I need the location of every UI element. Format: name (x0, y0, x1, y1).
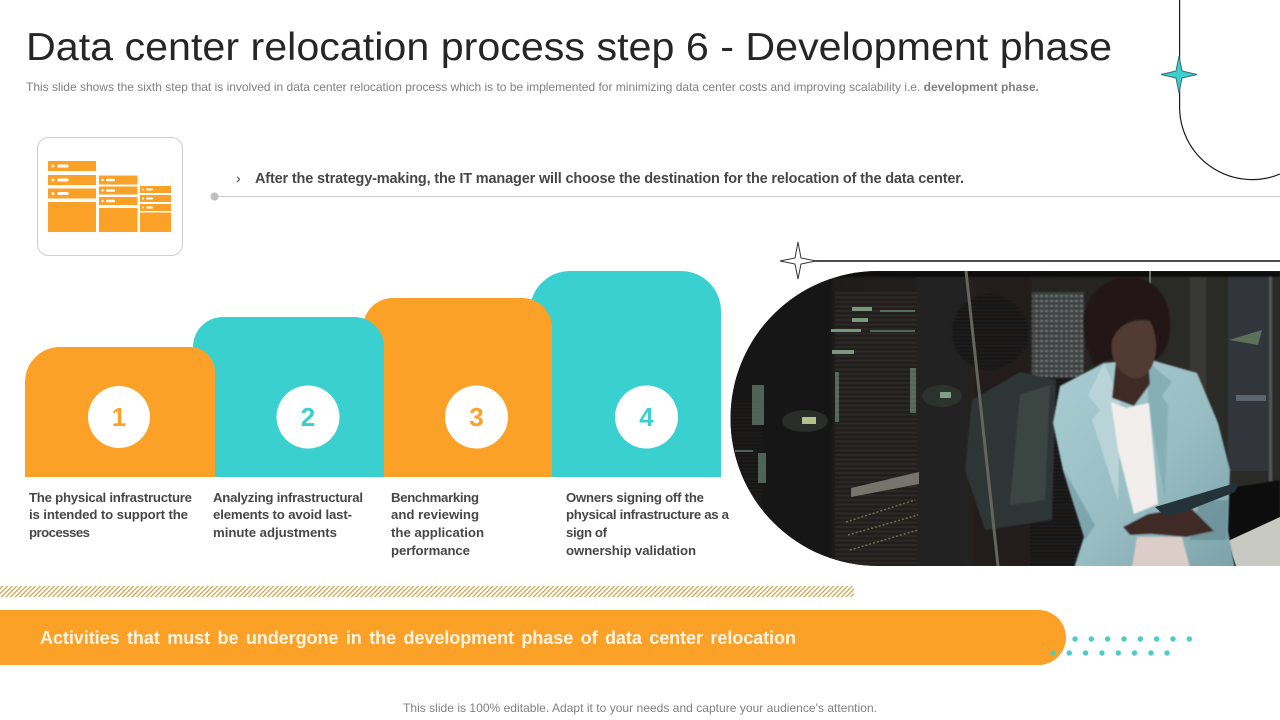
step 2 description: elements to avoid last- (213, 507, 352, 522)
star and line above photo (780, 242, 1280, 279)
hatched stripe (0, 586, 854, 597)
lapels (1088, 363, 1120, 500)
step 3 number (445, 386, 508, 448)
hair (1084, 277, 1170, 366)
step 3 description (391, 490, 484, 558)
step 4 description: Owners signing off the (566, 490, 704, 505)
step 1 description (29, 490, 192, 540)
step 2 block (193, 317, 384, 477)
orange banner (0, 610, 1066, 665)
key statement with connector line (210, 170, 1280, 200)
footer note: This slide is 100% editable. Adapt it to your needs and capture your audience's attention. (403, 701, 877, 715)
subtitle text: This slide shows the sixth step that is involved in data center relocation process which is to be implemented for minimizing data center costs and improving scalability i.e. development phase. (26, 80, 1039, 94)
hands (1123, 507, 1214, 537)
white top (1111, 402, 1158, 514)
step 2 number: 2 (301, 402, 315, 432)
tablet (1155, 482, 1239, 516)
step 1 number: 1 (112, 402, 126, 432)
neck (1112, 360, 1150, 406)
step 2 description (213, 490, 363, 540)
icon card: server stacks (38, 138, 182, 256)
banner text: Activities that must be undergone in the development phase of data center relocation (40, 628, 796, 648)
glass edges (966, 271, 1150, 566)
step 3 block (363, 298, 552, 477)
step 4 description (566, 490, 730, 558)
reflection silhouette (952, 294, 1056, 530)
step 1 number (88, 386, 150, 448)
face (1112, 320, 1156, 378)
dot pattern (1067, 636, 1192, 656)
step 1 description: The physical infrastructure (29, 490, 192, 505)
stepped process blocks (25, 271, 721, 477)
photo: woman with tablet in server room (730, 271, 1280, 568)
title: Data center relocation process step 6 - Development phase (26, 26, 1112, 69)
woman (1053, 277, 1239, 568)
key statement with connector line: After the strategy-making, the IT manager will choose the destination for the relocation of the data center. (255, 171, 964, 187)
step 3 number: 3 (469, 402, 484, 432)
step 4 block (530, 271, 721, 477)
step 4 number: 4 (639, 402, 654, 432)
step 4 number (615, 386, 678, 448)
step 3 description: and reviewing (391, 507, 479, 522)
step 1 description: processes (29, 525, 90, 540)
step 2 description: Analyzing infrastructural (213, 490, 363, 505)
step 4 description: physical infrastructure as a (566, 507, 730, 522)
key statement with connector line: › (236, 170, 241, 186)
box corner (1228, 517, 1280, 566)
step 1 block (25, 347, 215, 477)
step 4 description: ownership validation (566, 543, 696, 558)
step 3 description: Benchmarking (391, 490, 479, 505)
step 2 description: minute adjustments (213, 525, 337, 540)
server racks (730, 271, 1280, 566)
blazer (1053, 359, 1235, 568)
rack lights and displays (735, 307, 1266, 550)
step 1 description: is intended to support the (29, 507, 188, 522)
step 2 number (276, 386, 340, 448)
decorative corner arc with star (1161, 0, 1280, 180)
step 4 description: sign of (566, 525, 608, 540)
step 3 description: performance (391, 543, 470, 558)
icon: teal star (1161, 56, 1197, 93)
step 3 description: the application (391, 525, 484, 540)
